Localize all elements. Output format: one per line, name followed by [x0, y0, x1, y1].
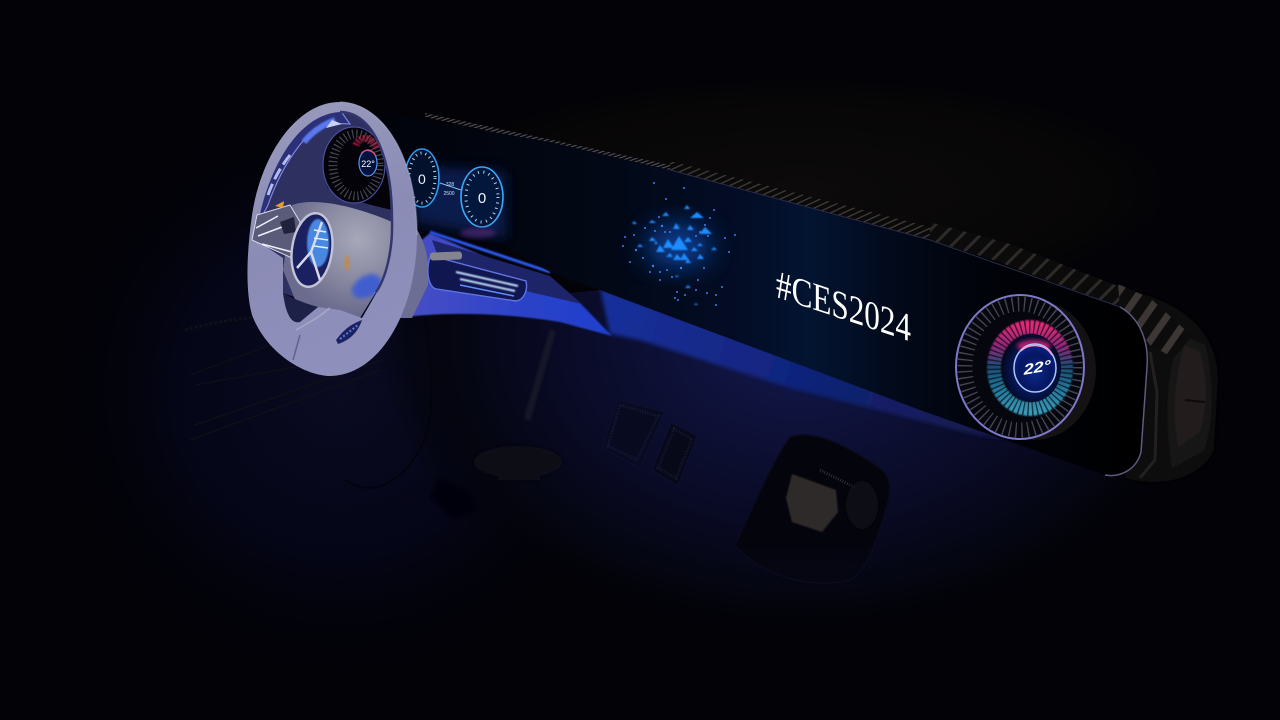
floor shapes — [430, 446, 562, 520]
behind-wheel cluster — [323, 127, 392, 210]
lower dash panel — [330, 290, 1280, 720]
lower-spoke hollow — [283, 293, 318, 322]
gauge: left speedometer: 0 — [418, 171, 426, 187]
lower spoke slot — [336, 320, 362, 344]
climate dial — [956, 295, 1096, 440]
column stalk and controller — [396, 225, 527, 318]
gauge: right speedometer: 328 — [446, 182, 454, 188]
hub — [283, 202, 392, 318]
turbine blades — [994, 327, 1066, 409]
see-through backdrop — [258, 112, 392, 310]
cluster glow — [412, 165, 506, 238]
outer fins — [965, 304, 1075, 430]
steering wheel — [247, 102, 417, 376]
temperature: 22° — [1022, 357, 1052, 379]
horn pad emblem — [287, 211, 337, 289]
wheel rim — [247, 102, 417, 376]
knob body — [972, 300, 1096, 440]
centre ring — [1014, 344, 1056, 392]
hashtag headline: #CES2024 — [776, 261, 911, 350]
gauge: right speedometer — [440, 167, 503, 238]
gauge: left speedometer — [405, 149, 439, 207]
vent slats — [425, 113, 1192, 358]
right air vent housing — [1125, 290, 1218, 482]
rim shading — [340, 112, 392, 292]
chrome spoke — [252, 201, 300, 258]
gauge: right speedometer: 2500 — [443, 191, 455, 197]
knee panel with seam — [185, 315, 553, 488]
chrome arc — [256, 110, 350, 228]
display panel — [380, 112, 1147, 476]
pedals — [602, 400, 697, 486]
glovebox opening — [735, 435, 890, 583]
particle cloud logo — [622, 182, 736, 306]
behind-wheel cluster: 22° — [361, 159, 375, 169]
blue light band under screen — [397, 232, 1010, 440]
gauge: right speedometer: 0 — [478, 190, 486, 207]
